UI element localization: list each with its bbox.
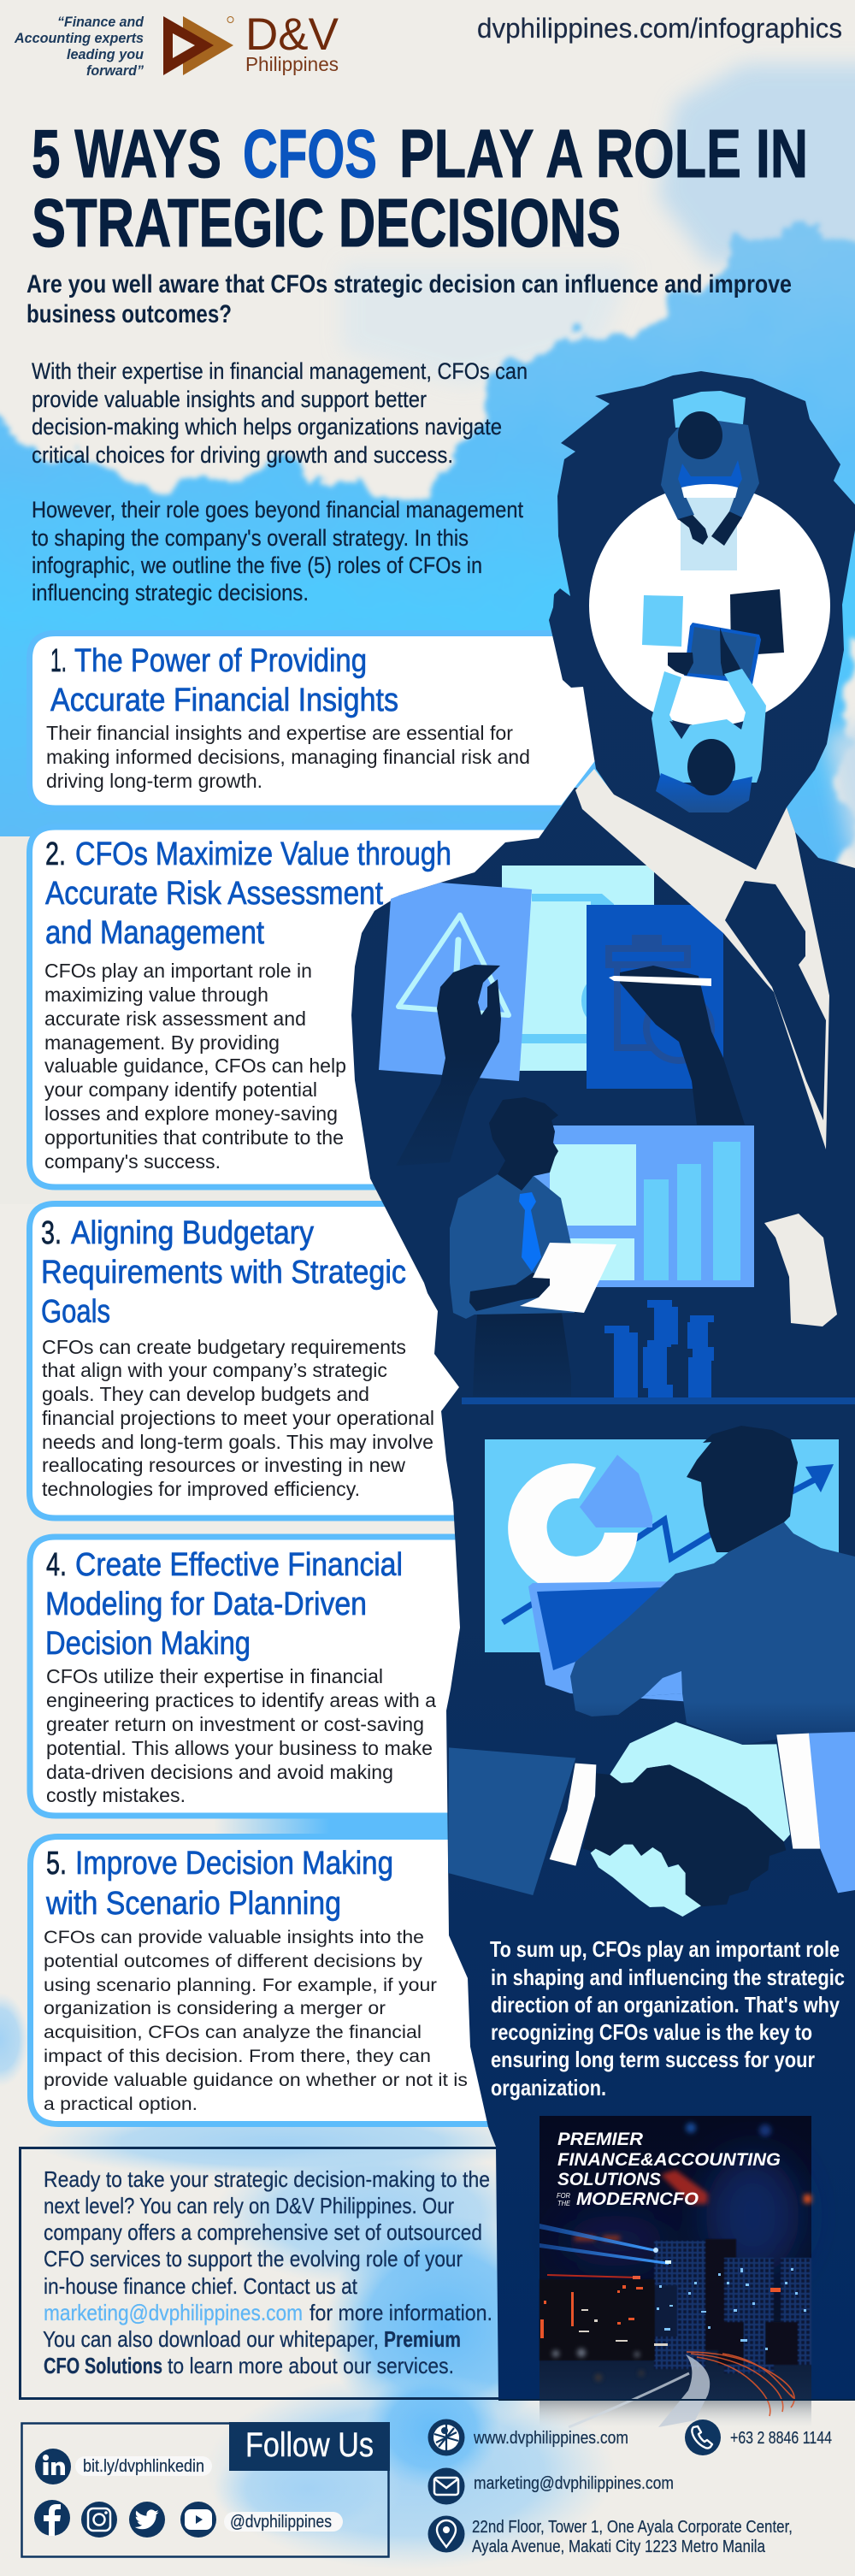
panel: role 5: with Scenario Planning [45,1886,341,1922]
intro paragraph 2: However, their role goes beyond financial management [32,497,523,523]
panel: role 4 [30,1537,547,1816]
whitepaper cover: SOLUTIONS [557,2170,661,2189]
intro paragraph 1 [32,358,528,468]
panel: role 4: CFOs utilize their expertise in financial [46,1665,383,1687]
panel: role 3: that align with your company’s strategic [42,1359,387,1381]
handle pill: @dvphilippines [230,2513,332,2532]
panel: follow us [22,2422,390,2557]
bottom rule [498,2399,855,2401]
whitepaper cover: MODERNCFO [576,2189,699,2209]
bar chart board [532,1126,754,1287]
panel: role 2: Accurate Risk Assessment [45,876,383,912]
header: tagline: leading you [67,47,144,62]
panel: role 4: Modeling for Data-Driven [45,1586,367,1622]
contact: address: 22nd Floor, Tower 1, One Ayala Corporate Center, [472,2518,793,2537]
panel: role 5: potential outcomes of different decisions by [44,1951,422,1971]
panel: role 4: data-driven decisions and avoid making [46,1761,393,1783]
contact: website: www.dvphilippines.com [473,2429,628,2448]
panel: role 3: CFOs can create budgetary requirements [42,1336,406,1358]
panel: role 4: Create Effective Financial [75,1547,403,1583]
papers on table [642,589,784,656]
panel: role 3: Goals [41,1294,110,1330]
icon: youtube [180,2502,216,2538]
whitepaper cover: THE [557,2200,571,2207]
call to action box: in-house finance chief. Contact us at [44,2273,358,2299]
panel: role 3: Aligning Budgetary [71,1215,314,1251]
panel: role 1: The Power of Providing [74,643,367,679]
panel: role 3: 3. [41,1215,62,1251]
icon: twitter [129,2502,165,2538]
panel: role 3 [29,1204,547,1518]
panel: role 1: 1. [50,643,67,679]
panel: role 5: provide valuable guidance on whether or not it is [44,2070,468,2090]
panel: role 5: acquisition, CFOs can analyze the financial [44,2022,422,2042]
pocket square [764,1214,837,1326]
title: CFOS [243,115,377,192]
call to action box [21,2148,568,2398]
intro paragraph 1: decision-making which helps organizations navigate [32,414,502,440]
head silhouette [549,371,855,872]
header: tagline: “Finance and [57,15,144,30]
website url: dvphilippines.com/infographics [477,13,842,44]
call to action box: Ready to take your strategic decision-making to the [44,2166,490,2192]
panel: role 3: Requirements with Strategic [41,1255,406,1291]
panel: role 2: opportunities that contribute to the [44,1126,344,1149]
panel: role 3: goals. They can develop budgets and [42,1383,369,1405]
whitepaper cover: FOR [557,2192,570,2200]
bookshelf [462,1300,855,1404]
panel: role 5: organization is considering a merger or [44,1998,386,2018]
panel: role 1: Their financial insights and expertise are essential for [46,722,513,744]
panel: role 5: CFOs can provide valuable insights into the [44,1927,424,1947]
contact: email: marketing@dvphilippines.com [474,2474,674,2493]
subtitle question [27,270,792,328]
figure: executive silhouette with scenes [351,371,855,2401]
panel: role 2: accurate risk assessment and [44,1007,306,1030]
top person at table [661,391,759,570]
intro paragraph 2: infographic, we outline the five (5) roles of CFOs in [32,552,482,578]
panel: role 3: reallocating resources or investing in new [42,1454,405,1476]
icon: instagram [81,2502,117,2538]
icon: facebook [34,2500,70,2536]
logo: D&V Philippines [163,9,339,75]
handshake [448,1722,855,1917]
call to action box: CFO Solutions [44,2353,162,2378]
panel: role 5: 5. [46,1846,67,1882]
monitor behind documents [502,866,654,1071]
contact: address: Ayala Avenue, Makati City 1223 Metro Manila [472,2538,766,2556]
contact: address [428,2516,793,2556]
call to action box: Premium [384,2326,461,2352]
blue document with warning triangle [379,883,532,1081]
call to action box: to learn more about our services. [168,2353,454,2378]
whitepaper cover: FINANCE&ACCOUNTING [557,2150,781,2170]
panel: follow us: Follow Us [245,2426,374,2464]
subtitle question: business outcomes? [27,300,232,328]
panel: role 4: potential. This allows your business to make [46,1737,433,1759]
logo: D&V Philippines: D&V [245,9,339,60]
man viewed from behind [570,1426,855,1745]
panel: role 5: Improve Decision Making [75,1846,393,1882]
header: tagline: Accounting experts [14,31,144,46]
logo: D&V Philippines: Philippines [245,53,339,75]
contact: phone [685,2419,832,2455]
intro paragraph 1: critical choices for driving growth and success. [32,442,453,468]
title: 5 WAYS [32,115,221,192]
intro paragraph 2 [32,497,523,606]
panel: role 5: using scenario planning. For example, if your [44,1975,437,1995]
panel: role 4: engineering practices to identify areas with a [46,1689,436,1711]
linkedin link pill: bit.ly/dvphlinkedin [83,2457,204,2476]
panel: role 2: 2. [45,836,66,872]
panel: role 3: needs and long-term goals. This may involve [42,1431,433,1453]
panel: role 2: CFOs Maximize Value through [75,836,451,872]
icon: linkedin [35,2449,71,2484]
contact: website [428,2419,628,2456]
title [32,115,808,261]
presentation screen with donut and trend arrow [485,1439,839,1652]
clipboard panel with right hand and pen [581,905,745,1125]
panel: role 5 [31,1837,564,2124]
panel: role 2: CFOs play an important role in [44,960,312,982]
call to action box: for more information. [310,2300,492,2325]
contact: phone: +63 2 8846 1144 [730,2429,832,2448]
panel: role 4: Decision Making [45,1626,251,1662]
necktie [725,881,826,1120]
panel: role 2: maximizing value through [44,984,268,1006]
call to action box: CFO services to support the evolving role of your [44,2246,463,2272]
panel: role 1: driving long-term growth. [46,770,262,792]
intro paragraph 2: to shaping the company's overall strategy. In this [32,525,469,551]
contact: email [428,2468,674,2504]
bottom person with tablet [652,623,766,812]
panel: role 2: company's success. [44,1150,221,1173]
call to action box: You can also download our whitepaper, [43,2326,379,2352]
small standing man with paper [450,1097,616,1397]
left hand [396,965,501,1166]
panel: role 5: a practical option. [44,2094,198,2114]
panel: role 4: greater return on investment or cost-saving [46,1713,424,1735]
closing statement: organization. [491,2075,606,2100]
panel: role 2: your company identify potential [44,1078,317,1101]
intro paragraph 1: With their expertise in financial management, CFOs can [32,358,528,384]
panel: role 1: making informed decisions, managing financial risk and [46,746,530,768]
whitepaper cover [540,2116,811,2427]
panel: role 2: valuable guidance, CFOs can help [44,1055,346,1077]
lapel and shirt [575,769,829,1149]
panel: role 5: impact of this decision. From there, they can [44,2046,431,2066]
body silhouette [351,788,855,2401]
intro paragraph 1: provide valuable insights and support better [32,387,427,412]
call to action box: next level? You can rely on D&V Philippines. Our [44,2193,454,2219]
intro paragraph 2: influencing strategic decisions. [32,580,309,606]
panel: role 3: technologies for improved efficiency. [42,1478,360,1500]
header: tagline: forward” [86,63,144,79]
panel: role 2: management. By providing [44,1031,280,1054]
panel: role 2: and Management [45,915,264,951]
panel: role 1 [29,633,598,808]
panel: role 4: costly mistakes. [46,1784,186,1806]
call to action box: marketing@dvphilippines.com [44,2300,303,2325]
call to action box: company offers a comprehensive set of outsourced [44,2219,482,2245]
panel: role 2: losses and explore money-saving [44,1102,338,1125]
closing statement [490,1936,845,2100]
round meeting table [589,485,830,726]
panel: role 2 [29,827,598,1187]
panel: role 1: Accurate Financial Insights [50,682,398,718]
header: tagline [14,15,144,79]
panel: role 3: financial projections to meet your operational [42,1407,434,1429]
whitepaper cover: PREMIER [557,2130,644,2149]
panel: role 4: 4. [46,1547,67,1583]
title: STRATEGIC DECISIONS [32,185,621,261]
laptop [528,1581,693,1702]
